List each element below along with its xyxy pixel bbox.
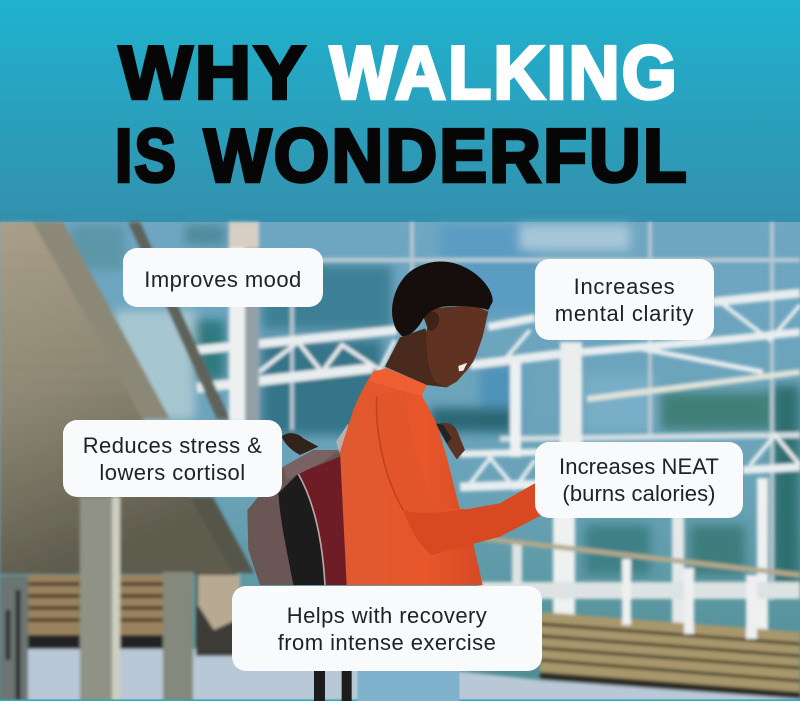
jeans and straps xyxy=(314,667,352,701)
card: increases mental clarity: mental clarity xyxy=(555,300,694,326)
title: WHY xyxy=(119,30,308,114)
sleeve xyxy=(376,392,542,555)
title: WALKING xyxy=(330,30,679,114)
columns xyxy=(229,222,245,422)
card: helps with recovery xyxy=(232,586,542,671)
card: helps with recovery: Helps with recovery xyxy=(287,602,487,628)
photo: station background xyxy=(0,222,800,701)
white beams xyxy=(197,293,800,490)
card: increases NEAT: (burns calories) xyxy=(562,481,716,506)
support columns xyxy=(80,497,112,701)
face xyxy=(426,305,488,387)
header band xyxy=(0,0,800,222)
card: increases mental clarity xyxy=(535,259,714,340)
photo bottom edge xyxy=(0,700,800,701)
card: helps with recovery: from intense exercise xyxy=(278,630,496,654)
collar xyxy=(369,368,427,396)
glass tones xyxy=(70,225,800,585)
card: improves mood: Improves mood xyxy=(144,267,302,292)
neck xyxy=(385,328,447,387)
card: reduces stress: lowers cortisol xyxy=(99,460,246,484)
backpack xyxy=(247,423,348,585)
photo: walking woman xyxy=(247,262,542,701)
roof underside xyxy=(0,222,236,574)
wood slats xyxy=(540,612,800,696)
card: reduces stress xyxy=(63,420,282,497)
hand and phone strap xyxy=(437,423,465,459)
floor xyxy=(0,649,800,701)
title: IS xyxy=(115,114,178,198)
title: WONDERFUL xyxy=(204,114,689,198)
card: improves mood xyxy=(123,248,323,307)
card: reduces stress: Reduces stress & xyxy=(83,432,262,458)
card: increases mental clarity: Increases xyxy=(574,274,675,298)
rail and white ledge xyxy=(480,538,800,575)
hair xyxy=(392,262,493,336)
mullions xyxy=(258,258,800,262)
sweater xyxy=(340,368,483,585)
ear xyxy=(424,311,439,331)
card: increases NEAT xyxy=(535,442,743,518)
title xyxy=(115,30,689,198)
blurred background architecture xyxy=(0,222,800,701)
roof beams xyxy=(33,222,170,419)
card: increases NEAT: Increases NEAT xyxy=(559,454,719,479)
left wood wall xyxy=(28,575,168,635)
